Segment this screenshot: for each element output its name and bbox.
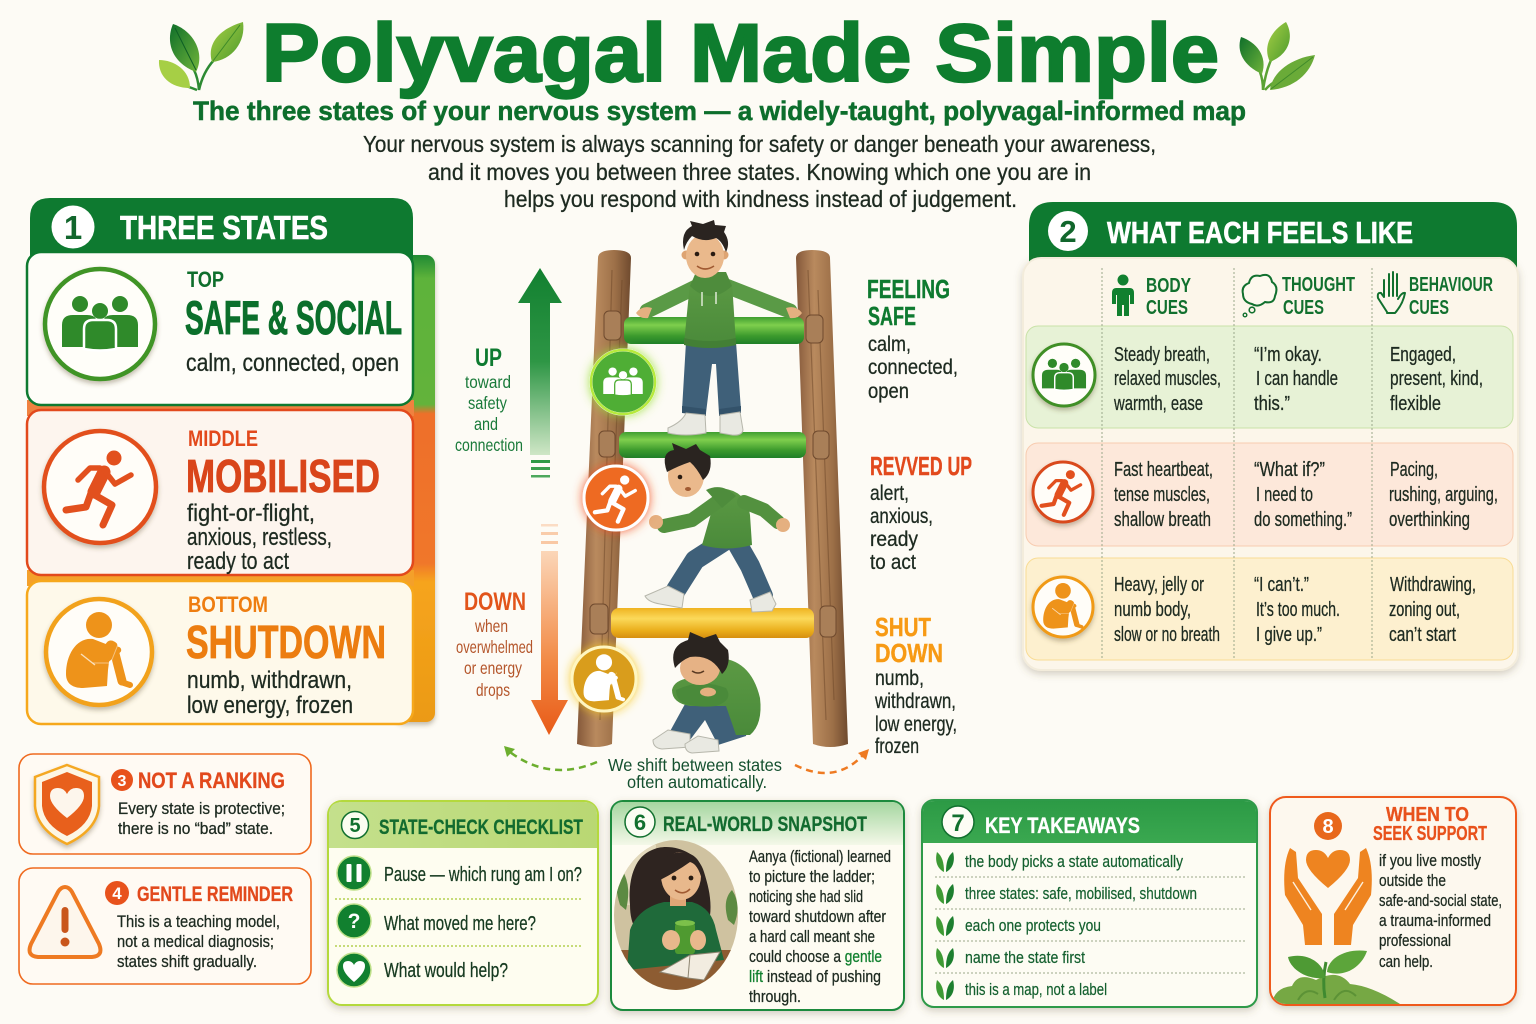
row: shutdown cues: It’s too much.: [1256, 599, 1340, 621]
card: mobilised: fight-or-flight,: [187, 500, 315, 527]
row: safe cues: warmth, ease: [1113, 393, 1203, 415]
row backgrounds: [1026, 326, 1513, 660]
card: mobilised: MIDDLE: [188, 426, 258, 451]
snapshot story text: lift instead of pushing: [749, 967, 881, 986]
row: safe cues: I can handle: [1256, 368, 1338, 390]
row: shutdown cues: I give up.”: [1256, 624, 1322, 646]
row: shutdown cues: [1033, 574, 1476, 646]
support text: professional: [1379, 931, 1451, 950]
snapshot story text: through.: [749, 987, 801, 1006]
illustration: sprout: [1272, 950, 1400, 1004]
panel 4: gentle reminder: GENTLE REMINDER: [137, 883, 293, 906]
arrow: dashed green: [504, 746, 597, 770]
checklist item 1: Pause — which rung am I on?: [384, 864, 582, 886]
support text: can help.: [1379, 952, 1433, 971]
panel 2 heading: [1029, 202, 1517, 272]
icon: warning triangle: [30, 887, 100, 957]
label: down: [456, 588, 533, 700]
snapshot story text: toward shutdown after: [749, 907, 886, 926]
ladder rungs: [590, 311, 836, 638]
row: safe cues: “I’m okay.: [1254, 344, 1322, 366]
arrow: dashed orange: [795, 749, 869, 773]
takeaway list: name the state first: [965, 949, 1085, 967]
state label: shut down: [874, 612, 957, 758]
intro text: and it moves you between three states. Knowing which one you are in: [428, 159, 1091, 185]
panel 5: state-check checklist: STATE-CHECK CHECKLIST: [379, 816, 583, 839]
icon: pause: [337, 856, 371, 890]
column header: behaviour cues: [1378, 272, 1493, 319]
badge: mobilised: [584, 466, 648, 530]
row: mobilised cues: Pacing,: [1390, 459, 1438, 481]
support text: outside the: [1379, 871, 1446, 890]
takeaway list: [936, 852, 1197, 1000]
state label: feeling safe: FEELING: [867, 274, 950, 304]
row: shutdown cues: “I can’t.”: [1254, 574, 1309, 596]
panel 7: key takeaways: [922, 800, 1257, 1007]
row: mobilised cues: Fast heartbeat,: [1114, 459, 1213, 481]
panel 6: real-world snapshot: [611, 801, 904, 1010]
panel 4: gentle reminder: states shift gradually.: [117, 952, 257, 971]
icon: question: [337, 904, 371, 938]
boy: mobilised, running: [645, 443, 790, 612]
support text: [1379, 851, 1502, 971]
row: safe cues: this.”: [1254, 393, 1290, 415]
snapshot story text: Aanya (fictional) learned: [749, 847, 891, 866]
state label: shut down: numb,: [875, 667, 924, 690]
label: up: connection: [455, 435, 523, 455]
label: up: [455, 344, 523, 455]
intro text: helps you respond with kindness instead of judgement.: [504, 186, 1017, 212]
label: up: UP: [475, 344, 502, 372]
panel 1 heading: 1: [64, 209, 82, 246]
state label: revved up: to act: [870, 551, 916, 574]
boy: shutdown, curled: [653, 632, 761, 753]
panel 2 heading: WHAT EACH FEELS LIKE: [1107, 215, 1413, 250]
card: shutdown: BOTTOM: [188, 592, 268, 617]
panel 1 heading: [30, 198, 413, 262]
boy: safe, standing: [636, 220, 802, 435]
card: safe and social: calm, connected, open: [186, 349, 399, 377]
column header: body cues: BODY: [1146, 275, 1192, 297]
state label: feeling safe: connected,: [868, 356, 958, 379]
panel 8: when to seek support: SEEK SUPPORT: [1373, 823, 1487, 845]
up arrow: [518, 268, 562, 478]
state label: revved up: ready: [870, 528, 918, 551]
row: shutdown cues: Heavy, jelly or: [1114, 574, 1204, 596]
row: shutdown cues: zoning out,: [1389, 599, 1460, 621]
state label: revved up: [870, 451, 972, 574]
caption: shifting: [608, 755, 782, 792]
support text: a trauma-informed: [1379, 911, 1491, 930]
panel 6: real-world snapshot: REAL-WORLD SNAPSHOT: [663, 813, 867, 836]
panel 4: gentle reminder: This is a teaching model,: [117, 912, 280, 931]
intro text: Your nervous system is always scanning for safety or danger beneath your awareness,: [363, 131, 1156, 157]
panel 8: when to seek support: 8: [1322, 816, 1334, 838]
state label: shut down: SHUT: [875, 612, 931, 642]
row: safe cues: present, kind,: [1390, 368, 1483, 390]
card: shutdown: SHUTDOWN: [186, 616, 386, 668]
label: down: when: [474, 616, 508, 636]
label: up: and: [474, 414, 498, 434]
state label: shut down: frozen: [875, 735, 919, 758]
badge: safe: [591, 350, 655, 414]
panel 7: key takeaways: 7: [951, 810, 965, 837]
column header: body cues: CUES: [1146, 297, 1188, 319]
card: safe and social: [27, 252, 413, 405]
state label: feeling safe: [867, 274, 958, 403]
row: mobilised cues: shallow breath: [1114, 509, 1211, 531]
panel 1 heading: THREE STATES: [120, 209, 328, 246]
snapshot story text: a hard call meant she: [749, 927, 875, 946]
label: up: safety: [468, 393, 507, 413]
panel 3: not a ranking: Every state is protective;: [118, 799, 285, 818]
row: shutdown cues: can’t start: [1389, 624, 1456, 646]
row: mobilised cues: overthinking: [1389, 509, 1470, 531]
state label: shut down: low energy,: [875, 713, 957, 736]
card: mobilised: MOBILISED: [186, 450, 380, 502]
state label: shut down: withdrawn,: [874, 690, 956, 713]
column header: behaviour cues: BEHAVIOUR: [1409, 274, 1493, 296]
panel 8: when to seek support: WHEN TO: [1386, 804, 1469, 826]
column header: body cues: [1112, 274, 1192, 319]
state label: feeling safe: SAFE: [868, 301, 916, 331]
card: shutdown: numb, withdrawn,: [187, 667, 352, 694]
card: safe and social: TOP: [187, 267, 224, 292]
intro text: [363, 131, 1156, 212]
row: safe cues: Steady breath,: [1114, 344, 1210, 366]
ladder rails: [577, 250, 848, 747]
state label: feeling safe: open: [868, 380, 909, 403]
takeaway list: each one protects you: [965, 917, 1101, 935]
panel 5: state-check checklist: [328, 801, 598, 1005]
state label: shut down: DOWN: [875, 638, 943, 668]
label: down: overwhelmed: [456, 637, 533, 657]
label: down: or energy: [464, 658, 522, 678]
panel 4: gentle reminder: [19, 868, 311, 984]
row: mobilised cues: I need to: [1256, 484, 1313, 506]
panel 3: not a ranking: [19, 754, 311, 854]
subtitle: The three states of your nervous system — a widely-taught, polyvagal-informed map: [193, 96, 1246, 126]
column header: behaviour cues: CUES: [1409, 297, 1449, 319]
panel 1: three states: [27, 198, 435, 724]
row: safe cues: [1033, 344, 1483, 415]
column header: thought cues: THOUGHT: [1282, 274, 1355, 296]
row: safe cues: flexible: [1390, 393, 1441, 415]
row: shutdown cues: slow or no breath: [1114, 624, 1220, 646]
snapshot story text: could choose a gentle: [749, 947, 882, 966]
icon: shield with heart: [35, 765, 99, 844]
panel 3: not a ranking: there is no “bad” state.: [118, 819, 273, 838]
title: Polyvagal Made Simple: [262, 8, 1219, 99]
row: safe cues: relaxed muscles,: [1114, 368, 1221, 390]
support text: safe-and-social state,: [1379, 891, 1502, 910]
row: shutdown cues: Withdrawing,: [1390, 574, 1476, 596]
panel 2 heading: 2: [1059, 214, 1077, 249]
panel 6: real-world snapshot: 6: [634, 810, 646, 835]
takeaway list: the body picks a state automatically: [965, 853, 1184, 871]
side gradient bar: [395, 255, 435, 722]
panel 2: what each feels like: [1023, 202, 1518, 670]
label: down: drops: [476, 680, 510, 700]
takeaway list: three states: safe, mobilised, shutdown: [965, 885, 1197, 903]
row: mobilised cues: do something.”: [1254, 509, 1352, 531]
state label: revved up: alert,: [870, 482, 909, 505]
column header: thought cues: CUES: [1283, 297, 1324, 319]
icon: question: ?: [348, 910, 360, 933]
panel 3: not a ranking: NOT A RANKING: [138, 768, 285, 793]
card: shutdown: [27, 581, 413, 724]
state label: revved up: anxious,: [870, 505, 933, 528]
panel 7: key takeaways: KEY TAKEAWAYS: [985, 813, 1140, 838]
portrait: Aanya with mug: [612, 838, 740, 994]
card: mobilised: ready to act: [187, 548, 289, 575]
column header: thought cues: [1243, 274, 1355, 319]
panel 4: gentle reminder: not a medical diagnosis;: [117, 932, 274, 951]
snapshot story text: noticing she had slid: [749, 887, 863, 906]
down arrow: [531, 524, 568, 735]
card: mobilised: anxious, restless,: [187, 524, 332, 551]
panel 5: state-check checklist: 5: [349, 815, 361, 837]
checklist item 2: What moved me here?: [384, 913, 536, 935]
caption: shifting: often automatically.: [627, 772, 767, 792]
caption: shifting: We shift between states: [608, 755, 782, 775]
row: mobilised cues: tense muscles,: [1114, 484, 1210, 506]
card: mobilised: [27, 410, 413, 575]
label: down: DOWN: [464, 588, 526, 616]
row: safe cues: Engaged,: [1390, 344, 1456, 366]
label: up: toward: [465, 372, 511, 392]
checklist item 3: What would help?: [384, 960, 508, 982]
snapshot story text: [749, 847, 891, 1006]
state label: feeling safe: calm,: [868, 333, 911, 356]
card: shutdown: low energy, frozen: [187, 692, 353, 719]
state label: revved up: REVVED UP: [870, 451, 972, 481]
row: mobilised cues: [1033, 459, 1498, 531]
row: mobilised cues: “What if?”: [1254, 459, 1325, 481]
icon: leaves left: [159, 22, 243, 90]
row: mobilised cues: rushing, arguing,: [1389, 484, 1498, 506]
row: shutdown cues: numb body,: [1114, 599, 1191, 621]
icon: leaves right: [1240, 22, 1315, 90]
badge: shutdown: [572, 647, 636, 711]
icon: hands holding heart: [1284, 848, 1372, 945]
support text: if you live mostly: [1379, 851, 1481, 870]
panel 8: when to seek support: [1270, 797, 1516, 1005]
card: safe and social: SAFE & SOCIAL: [185, 291, 402, 344]
snapshot story text: to picture the ladder;: [749, 867, 875, 886]
ladder: [577, 250, 848, 747]
takeaway list: this is a map, not a label: [965, 981, 1107, 999]
icon: heart: [337, 953, 371, 987]
panel 4: gentle reminder: 4: [112, 884, 122, 903]
panel 3: not a ranking: 3: [118, 773, 127, 790]
